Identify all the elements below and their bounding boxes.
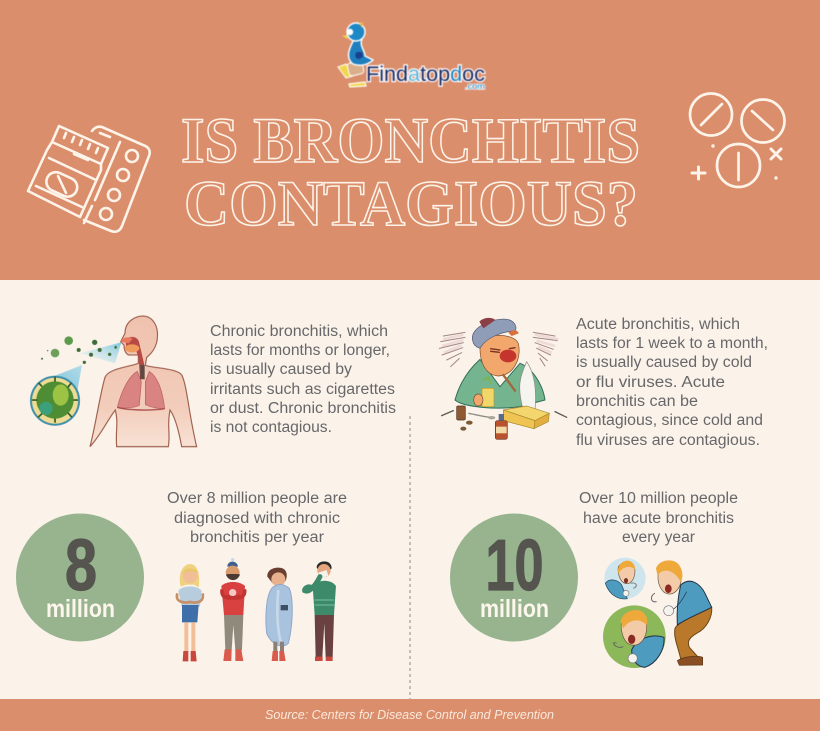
text: chronic bronchitis description: is not contagious. xyxy=(210,419,332,436)
text: acute bronchitis description: Acute bronchitis, which xyxy=(576,316,740,333)
medicine bottle xyxy=(495,421,507,439)
icon: duck mascot xyxy=(338,22,373,87)
lungs xyxy=(117,371,141,408)
eyes xyxy=(491,348,515,352)
thermometer xyxy=(503,375,515,391)
text: acute bronchitis description: lasts for 1 week to a month, xyxy=(576,335,768,352)
exhaled cone xyxy=(80,342,121,363)
person: woman in blanket xyxy=(266,568,292,661)
person: blonde woman xyxy=(177,564,203,661)
glass of drink xyxy=(482,388,494,407)
spoon and pills xyxy=(468,413,492,417)
ice pack xyxy=(472,319,516,348)
header band xyxy=(0,0,820,280)
illustration: lungs and airborne virus xyxy=(31,316,197,447)
text: acute statistic: have acute bronchitis xyxy=(583,510,734,527)
title: IS BRONCHITIS xyxy=(181,105,640,177)
tissue box xyxy=(503,406,549,421)
green robe xyxy=(455,359,545,408)
text: acute statistic xyxy=(579,490,738,546)
text: chronic statistic: Over 8 million people are xyxy=(167,490,347,507)
airway xyxy=(125,337,145,379)
text: acute bronchitis description: flu viruses are contagious. xyxy=(576,432,760,449)
stat circle: 10 million xyxy=(450,514,578,642)
text: acute bronchitis description: bronchitis can be xyxy=(576,393,698,410)
source citation: Source: Centers for Disease Control and Prevention xyxy=(265,708,554,722)
text: chronic bronchitis description: or dust. Chronic bronchitis xyxy=(210,400,396,417)
text: acute bronchitis description: or flu viruses. Acute xyxy=(576,374,725,391)
title: CONTAGIOUS? xyxy=(184,168,638,240)
virus lens xyxy=(31,377,79,425)
text: chronic bronchitis description: irritants such as cigarettes xyxy=(210,381,395,398)
illustration: sick man with ice pack xyxy=(439,318,567,439)
icon: pill bottle and blister pack xyxy=(28,126,150,232)
text: chronic bronchitis description: lasts for months or longer, xyxy=(210,342,390,359)
illustration: four people with cold symptoms xyxy=(177,558,336,661)
standing man xyxy=(651,560,712,665)
text: chronic statistic xyxy=(167,490,347,546)
illustration: coughing man xyxy=(603,558,712,668)
logo: Findatopdoc xyxy=(338,22,485,91)
icon: tablets and sparkles xyxy=(690,94,784,187)
stat circle: 8 million: 8 xyxy=(65,526,97,606)
text: chronic statistic: bronchitis per year xyxy=(190,529,324,546)
pill jar xyxy=(457,406,465,420)
text: chronic statistic: diagnosed with chronic xyxy=(174,510,340,527)
text: acute bronchitis description: is usually caused by cold xyxy=(576,354,752,371)
stat circle: 10 million: 10 xyxy=(486,526,544,606)
logo domain: .com xyxy=(465,81,485,91)
small blue circle portrait xyxy=(604,558,646,599)
text: acute bronchitis description: contagious, since cold and xyxy=(576,412,763,429)
text: acute statistic: Over 10 million people xyxy=(579,490,738,507)
text: chronic bronchitis description: Chronic bronchitis, which xyxy=(210,323,388,340)
logo wordmark: Findatopdoc xyxy=(366,63,485,86)
large green circle portrait xyxy=(603,605,666,668)
zoom cone xyxy=(36,365,82,391)
virus particles xyxy=(41,336,117,364)
title xyxy=(181,105,640,240)
face xyxy=(480,335,519,376)
red nose xyxy=(500,350,516,362)
footer band xyxy=(0,699,820,731)
text: acute bronchitis description xyxy=(576,316,768,449)
torso and head xyxy=(90,316,197,447)
ache lines xyxy=(439,332,557,367)
stat circle: 8 million: million xyxy=(46,595,115,623)
tissue xyxy=(520,362,536,410)
person: man blowing nose xyxy=(305,561,336,661)
stat circle: 8 million xyxy=(16,514,144,642)
center dashed divider xyxy=(409,416,411,699)
stat circle: 10 million: million xyxy=(480,595,549,623)
text: acute statistic: every year xyxy=(622,529,695,546)
text: chronic bronchitis description xyxy=(210,323,396,436)
text: chronic bronchitis description: is usually caused by xyxy=(210,361,352,378)
person: man in red sweater xyxy=(221,558,245,661)
